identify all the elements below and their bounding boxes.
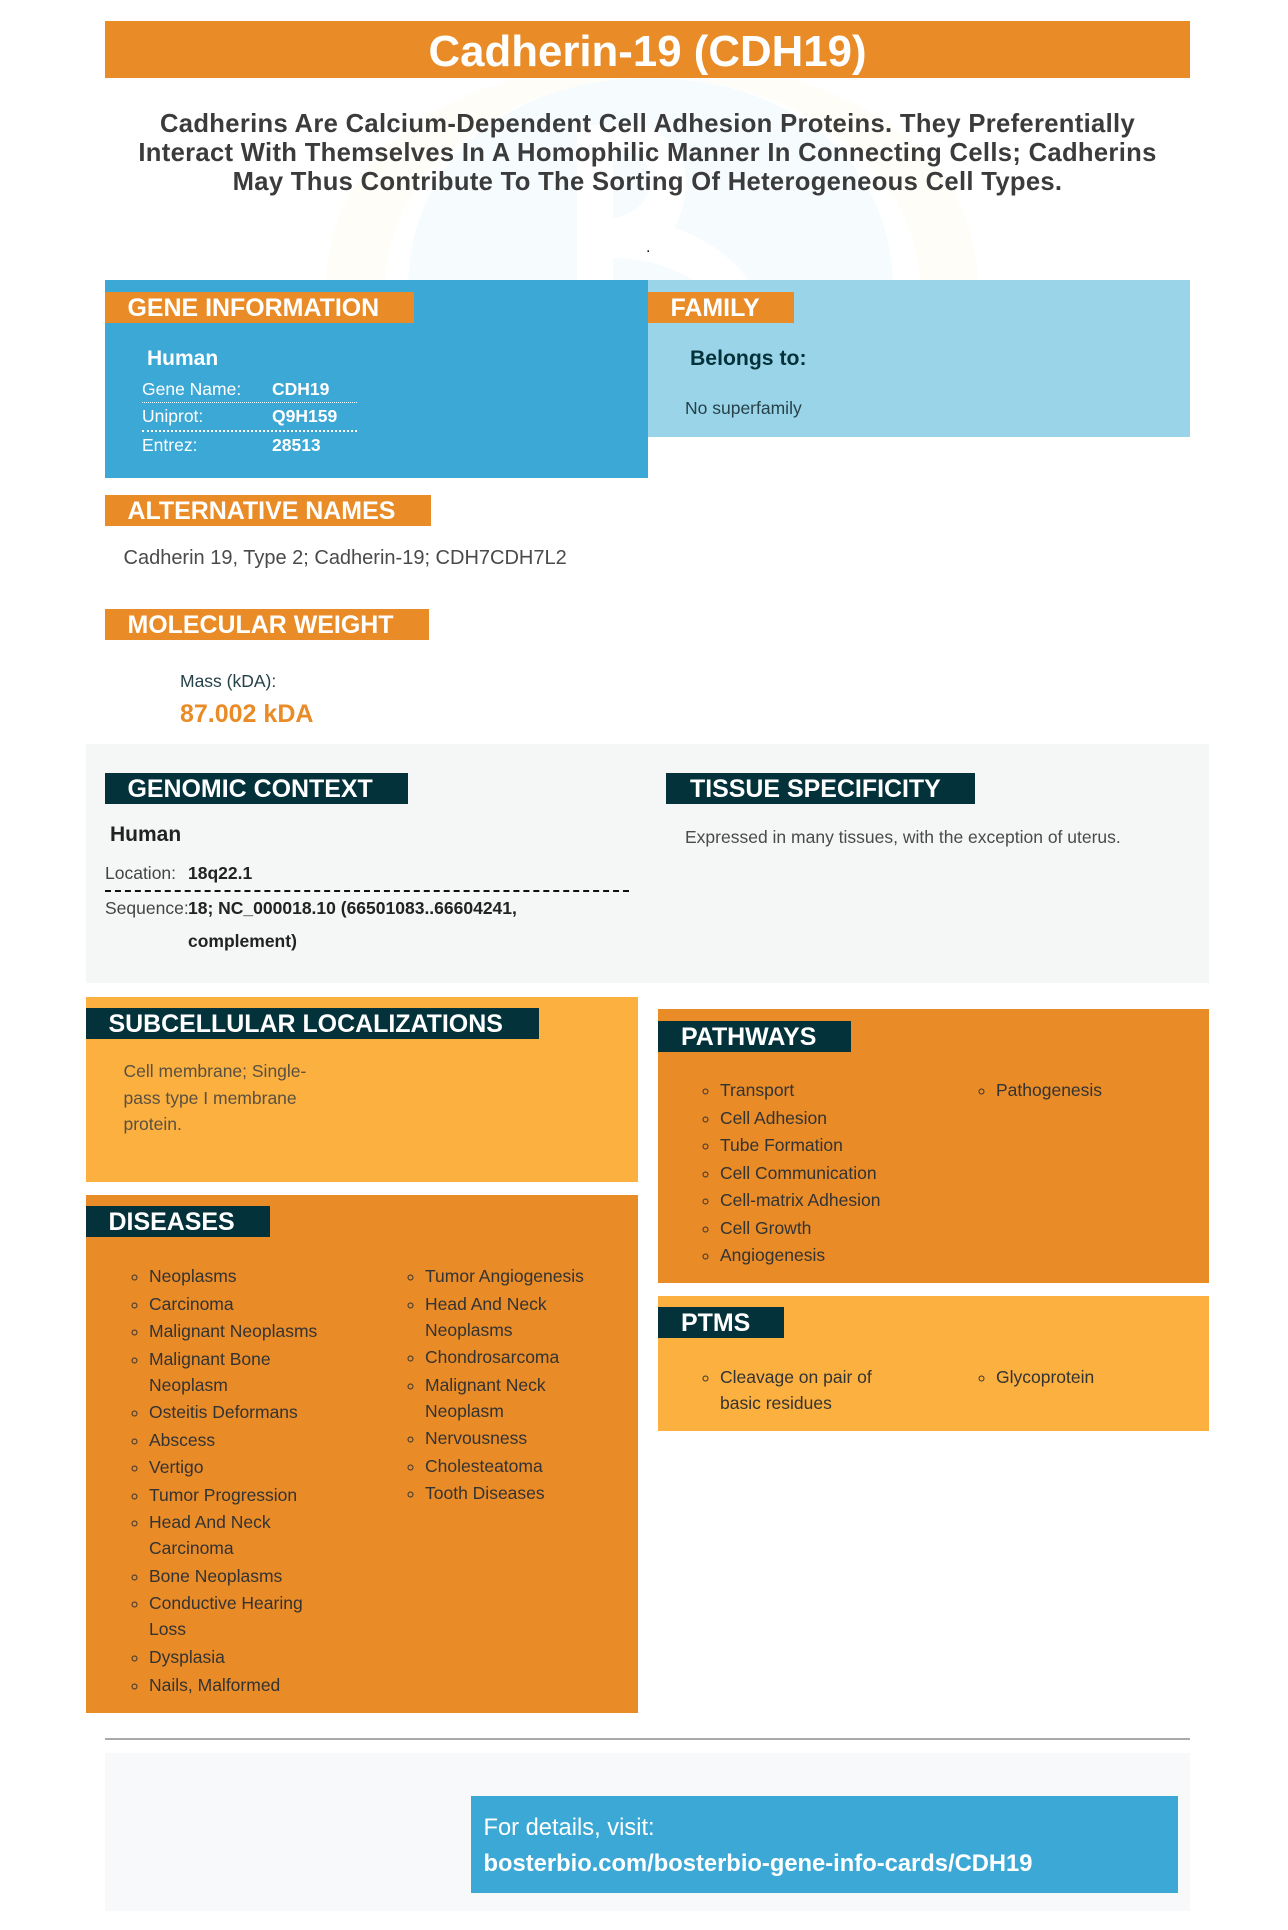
disease list column 1: Dysplasia — [149, 1647, 225, 1667]
pathway list column 1: Cell Adhesion — [720, 1108, 827, 1128]
family value: No superfamily — [685, 398, 802, 418]
ptm list column 1: basic residues — [720, 1393, 832, 1413]
mass value: 87.002 kDA — [180, 700, 313, 728]
heading: pathways: PATHWAYS — [681, 1023, 816, 1051]
pathway list column 1 — [702, 1080, 880, 1265]
heading: genomic context: GENOMIC CONTEXT — [128, 775, 373, 803]
footer panel — [105, 1753, 1190, 1911]
belongs to label: Belongs to: — [690, 347, 807, 370]
sequence row: Sequence: — [105, 898, 189, 918]
callout label: For details, visit: — [484, 1815, 655, 1841]
disease list column 2: Chondrosarcoma — [425, 1347, 559, 1367]
watermark logo — [408, 78, 892, 280]
heading: ptms: PTMS — [681, 1309, 750, 1337]
title — [105, 21, 1190, 78]
entrez row — [142, 435, 321, 455]
entrez row: 28513 — [272, 435, 321, 455]
ptm list column 1 — [702, 1367, 872, 1413]
disease list column 1: Carcinoma — [149, 1538, 234, 1558]
uniprot row — [142, 404, 357, 432]
heading: molecular weight: MOLECULAR WEIGHT — [128, 611, 393, 639]
pathway list column 1: Transport — [720, 1080, 794, 1100]
location row: 18q22.1 — [188, 863, 252, 883]
panel: ptms — [658, 1296, 1209, 1431]
heading: pathways — [658, 1021, 851, 1052]
molecular weight value — [180, 671, 313, 728]
disease list column 1: Malignant Neoplasms — [149, 1321, 317, 1341]
uniprot row: Uniprot: — [142, 406, 203, 426]
disease list column 1: Carcinoma — [149, 1294, 234, 1314]
panel: diseases — [86, 1195, 638, 1713]
heading: family — [648, 292, 794, 323]
gene name row: Gene Name: — [142, 379, 241, 399]
ptm list column 2: Glycoprotein — [996, 1367, 1094, 1387]
heading: subcellular localizations: SUBCELLULAR LOCALIZATIONS — [108, 1010, 503, 1038]
panel: family — [648, 280, 1190, 437]
subtitle — [138, 110, 1157, 196]
disease list column 1: Loss — [149, 1619, 186, 1639]
heading: family: FAMILY — [670, 294, 760, 322]
pathway list column 1: Cell-matrix Adhesion — [720, 1190, 880, 1210]
pathway list column 2: Pathogenesis — [996, 1080, 1102, 1100]
species label: Human — [147, 347, 218, 370]
disease list column 1: Conductive Hearing — [149, 1593, 303, 1613]
heading: alternative names: ALTERNATIVE NAMES — [128, 497, 395, 525]
pathway list column 1: Angiogenesis — [720, 1245, 825, 1265]
uniprot row: Q9H159 — [272, 406, 337, 426]
disease list column 2: Head And Neck — [425, 1294, 547, 1314]
disease list column 1: Tumor Progression — [149, 1485, 297, 1505]
subcellular text: Cell membrane; Single- — [124, 1061, 306, 1081]
location row — [105, 860, 629, 892]
subcellular text: pass type I membrane — [124, 1088, 297, 1108]
heading: diseases — [86, 1206, 270, 1237]
heading: tissue specificity: TISSUE SPECIFICITY — [690, 775, 941, 803]
heading: ptms — [658, 1307, 784, 1338]
ptm list column 1: Cleavage on pair of — [720, 1367, 872, 1387]
callout: details link — [471, 1796, 1178, 1893]
gene name row — [142, 377, 357, 403]
location row: Location: — [105, 863, 176, 883]
species label: Human — [110, 823, 181, 846]
disease list column 1: Abscess — [149, 1430, 215, 1450]
disease list column 1: Bone Neoplasms — [149, 1566, 282, 1586]
pathway list column 1: Cell Growth — [720, 1218, 811, 1238]
mass label: Mass (kDA): — [180, 671, 276, 691]
heading: diseases: DISEASES — [108, 1208, 235, 1236]
disease list column 2: Neoplasm — [425, 1401, 504, 1421]
panel: subcellular localizations — [86, 997, 638, 1182]
title: Cadherin-19 (CDH19) — [428, 27, 867, 76]
subcellular text — [124, 1061, 306, 1134]
pathway list column 1: Tube Formation — [720, 1135, 843, 1155]
disease list column 1: Osteitis Deformans — [149, 1402, 298, 1422]
heading: gene information: GENE INFORMATION — [128, 294, 379, 322]
subtitle: Cadherins Are Calcium-Dependent Cell Adhesion Proteins. They Preferentially — [160, 110, 1135, 138]
panel: genomic context and tissue specificity — [86, 744, 1209, 983]
sequence row — [105, 898, 517, 951]
panel: gene information — [105, 280, 648, 478]
disease list column 1 — [132, 1266, 317, 1695]
disease list column 2: Malignant Neck — [425, 1375, 546, 1395]
stray dot: . — [646, 239, 650, 256]
disease list column 1: Nails, Malformed — [149, 1675, 280, 1695]
entrez row: Entrez: — [142, 435, 197, 455]
subcellular text: protein. — [124, 1114, 182, 1134]
disease list column 1: Vertigo — [149, 1457, 203, 1477]
tissue specificity text: Expressed in many tissues, with the exception of uterus. — [685, 827, 1121, 847]
callout url: bosterbio.com/bosterbio-gene-info-cards/CDH19 — [484, 1850, 1032, 1877]
disease list column 2: Tooth Diseases — [425, 1483, 545, 1503]
disease list column 2: Cholesteatoma — [425, 1456, 543, 1476]
sequence row: complement) — [188, 931, 297, 951]
disease list column 1: Head And Neck — [149, 1512, 271, 1532]
disease list column 1: Neoplasms — [149, 1266, 237, 1286]
subtitle: May Thus Contribute To The Sorting Of Heterogeneous Cell Types. — [233, 168, 1062, 196]
disease list column 2: Tumor Angiogenesis — [425, 1266, 584, 1286]
disease list column 2: Nervousness — [425, 1428, 527, 1448]
disease list column 1: Neoplasm — [149, 1375, 228, 1395]
pathway list column 1: Cell Communication — [720, 1163, 877, 1183]
disease list column 2: Neoplasms — [425, 1320, 513, 1340]
alternative names text: Cadherin 19, Type 2; Cadherin-19; CDH7CDH7L2 — [124, 547, 567, 569]
gene name row: CDH19 — [272, 379, 329, 399]
subtitle: Interact With Themselves In A Homophilic Manner In Connecting Cells; Cadherins — [138, 139, 1157, 167]
disease list column 2 — [408, 1266, 584, 1503]
sequence row: 18; NC_000018.10 (66501083..66604241, — [188, 898, 517, 918]
panel: pathways — [658, 1009, 1209, 1283]
disease list column 1: Malignant Bone — [149, 1349, 271, 1369]
